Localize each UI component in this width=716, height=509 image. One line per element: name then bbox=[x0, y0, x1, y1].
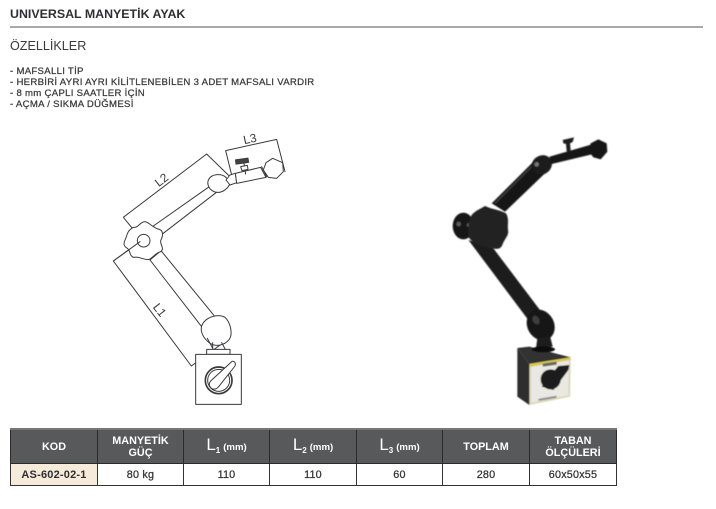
table header row: KOD bbox=[42, 440, 66, 452]
upper joint bbox=[528, 151, 556, 179]
star knob bbox=[124, 222, 162, 260]
title: UNIVERSAL MANYETİK AYAK bbox=[10, 7, 185, 21]
lower joint bbox=[521, 304, 560, 346]
table header row: TABAN bbox=[554, 434, 591, 446]
dimension L3 bbox=[226, 131, 285, 175]
table data row: 110 bbox=[304, 468, 322, 480]
table data row: 60x50x55 bbox=[549, 468, 597, 480]
top clamp bar bbox=[226, 158, 283, 185]
feature list: - HERBİRİ AYRI AYRI KİLİTLENEBİLEN 3 ADET MAFSALI VARDIR bbox=[10, 77, 314, 88]
table header row: GÜÇ bbox=[128, 446, 152, 458]
heading: features: ÖZELLİKLER bbox=[10, 39, 86, 53]
lower arm bbox=[150, 251, 215, 327]
table header row: L1 (mm) bbox=[206, 435, 247, 455]
dimension L2: L2 bbox=[152, 170, 171, 190]
dial knob bbox=[541, 365, 569, 390]
table header row: L2 (mm) bbox=[293, 435, 333, 455]
dimension L3: L3 bbox=[242, 131, 258, 147]
upper arm bbox=[153, 186, 216, 235]
base neck bbox=[207, 338, 226, 351]
dimension L1: L1 bbox=[150, 301, 169, 320]
feature list: - 8 mm ÇAPLI SAATLER İÇİN bbox=[10, 88, 145, 99]
title rule bbox=[10, 26, 703, 28]
feature list: - AÇMA / SIKMA DÜĞMESİ bbox=[10, 99, 134, 110]
base collar bbox=[207, 349, 230, 354]
product photo of the magnetic stand bbox=[452, 136, 608, 406]
feature list: - MAFSALLI TİP bbox=[10, 66, 84, 77]
upper joint bbox=[208, 175, 230, 192]
knob hub bbox=[137, 234, 150, 247]
technical drawing of the magnetic stand bbox=[112, 131, 286, 405]
lower joint bbox=[201, 316, 231, 345]
table data row bbox=[11, 464, 597, 485]
dial bbox=[205, 361, 235, 394]
table header row bbox=[11, 430, 616, 485]
base top bbox=[517, 347, 571, 364]
table header row: L3 (mm) bbox=[379, 435, 420, 455]
base left side bbox=[517, 348, 529, 405]
table data row: 110 bbox=[218, 468, 235, 480]
upper arm bbox=[492, 162, 547, 212]
table header row: TOPLAM bbox=[463, 440, 509, 452]
lower arm bbox=[468, 240, 545, 327]
feature list bbox=[10, 66, 314, 110]
base neck bbox=[536, 336, 553, 348]
table header row: MANYETİK bbox=[112, 434, 169, 446]
rear ball joint bbox=[453, 213, 474, 239]
dimension L1 bbox=[113, 242, 223, 366]
brand label bbox=[543, 362, 557, 367]
table data row: 280 bbox=[477, 468, 495, 480]
end knob bbox=[588, 139, 607, 159]
base front panel bbox=[529, 357, 571, 405]
table data row: 80 kg bbox=[127, 468, 154, 480]
top thumb screw bbox=[563, 137, 574, 152]
base caption bbox=[538, 396, 557, 401]
magnet base bbox=[196, 354, 241, 404]
dimension L2 bbox=[123, 154, 231, 242]
table data row: 60 bbox=[393, 468, 406, 480]
top clamp bar bbox=[549, 144, 596, 164]
star knob bbox=[468, 206, 508, 249]
specification table bbox=[10, 428, 617, 486]
table header row: ÖLÇÜLERİ bbox=[545, 446, 601, 458]
table data row: AS-602-02-1 bbox=[21, 468, 87, 480]
